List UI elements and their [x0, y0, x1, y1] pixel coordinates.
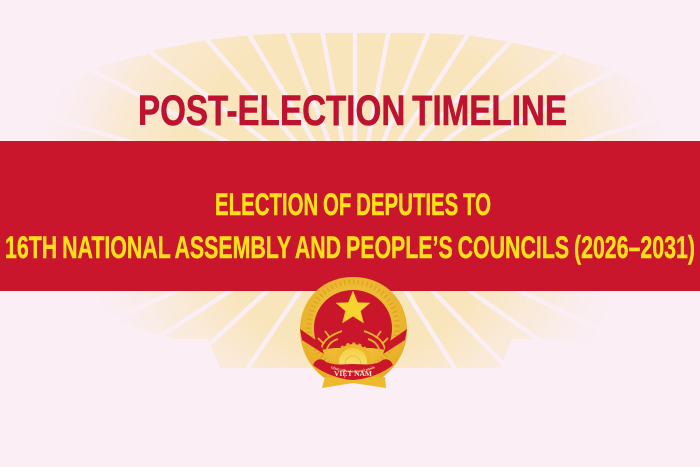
sunburst rays [0, 8, 700, 372]
emblem banner small text: CỘNG HÒA XÃ HỘI CHỦ NGHĨA [331, 366, 375, 373]
red banner [0, 141, 700, 291]
ray gaps [0, 8, 700, 372]
emblem star [336, 291, 370, 323]
emblem wreath texture [309, 282, 397, 370]
emblem banner text: VIỆT NAM [334, 369, 372, 378]
emblem side ribbons [300, 329, 324, 354]
subtitle line 1: ELECTION OF DEPUTIES TO [215, 186, 491, 222]
emblem base [322, 377, 386, 388]
title: POST-ELECTION TIMELINE [138, 87, 567, 135]
emblem wreath [300, 277, 407, 379]
icon: national emblem [300, 277, 407, 388]
emblem red field [314, 290, 392, 350]
emblem gear [335, 344, 371, 380]
emblem banner [313, 359, 393, 380]
emblem rice ears [318, 331, 388, 352]
